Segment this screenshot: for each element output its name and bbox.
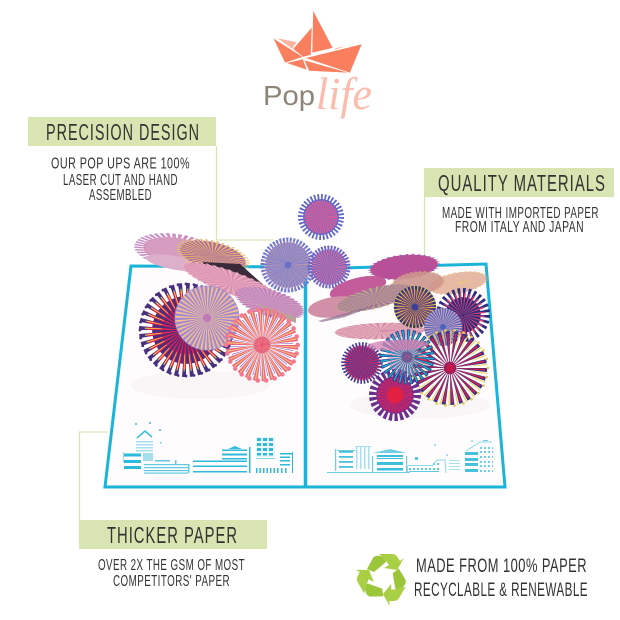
heading band bbox=[424, 168, 614, 197]
body text bbox=[98, 557, 245, 590]
card outline bbox=[105, 264, 505, 487]
firework: blue lavender bbox=[424, 308, 462, 346]
firework: dark underside bbox=[203, 262, 267, 288]
heading: THICKER PAPER bbox=[107, 522, 238, 548]
firework: top bbox=[301, 197, 341, 237]
firework: lavender centre bbox=[263, 240, 313, 290]
card right panel bbox=[306, 264, 506, 487]
connector: precision design bbox=[216, 146, 273, 240]
firework: flat left smear 4 bbox=[234, 281, 306, 325]
card left panel bbox=[105, 266, 305, 487]
firework: teal bbox=[392, 342, 422, 372]
body text: OUR POP UPS ARE 100% bbox=[51, 156, 190, 172]
firework: flat right smears bbox=[307, 252, 488, 341]
firework: purple pink centre bbox=[310, 248, 348, 286]
body text bbox=[442, 205, 599, 236]
connector: thicker paper bbox=[80, 432, 108, 520]
logo word: life: life bbox=[316, 68, 372, 119]
callout: thicker paper bbox=[79, 520, 267, 590]
icon: origami boat bbox=[273, 10, 362, 73]
connector: quality materials bbox=[424, 197, 426, 256]
callout: quality materials bbox=[424, 168, 614, 236]
card: open pop-up card bbox=[105, 264, 506, 487]
firework: flat left smear 1b bbox=[145, 251, 207, 275]
skyline: left bbox=[123, 422, 293, 474]
heading: PRECISION DESIGN bbox=[46, 119, 200, 145]
icon: recycling symbol bbox=[352, 554, 412, 608]
body text: OVER 2X THE GSM OF MOST bbox=[98, 557, 245, 574]
skyline: right bbox=[327, 440, 493, 473]
heading band bbox=[28, 117, 216, 146]
logo word: Pop: Pop bbox=[263, 80, 315, 111]
firework: flat left smear 1 bbox=[138, 231, 214, 271]
firework: red bottom bbox=[373, 373, 417, 417]
firework: flat left smear 2 bbox=[177, 235, 249, 277]
firework: pink spider bbox=[226, 309, 298, 381]
fireworks: pop-up sculpture bbox=[138, 197, 488, 417]
firework: yellow red spider bbox=[412, 330, 488, 406]
heading band bbox=[79, 520, 267, 549]
body text: LASER CUT AND HAND bbox=[63, 172, 178, 189]
firework: dark navy right bbox=[441, 293, 485, 337]
body text bbox=[51, 156, 190, 204]
body text: COMPETITORS' PAPER bbox=[113, 573, 230, 590]
firework: dark starburst left bbox=[140, 284, 232, 376]
firework: dark yellow bbox=[394, 286, 436, 328]
body text: ASSEMBLED bbox=[89, 187, 152, 204]
card shadows bbox=[130, 371, 490, 419]
firework: flat left smear 3 bbox=[180, 255, 284, 311]
logo: Poplife bbox=[263, 10, 372, 119]
firework: red purple left bbox=[344, 345, 380, 381]
callout: precision design bbox=[28, 117, 216, 204]
text: recyclable note bbox=[414, 556, 588, 601]
firework: lavender overlay left bbox=[175, 286, 239, 350]
